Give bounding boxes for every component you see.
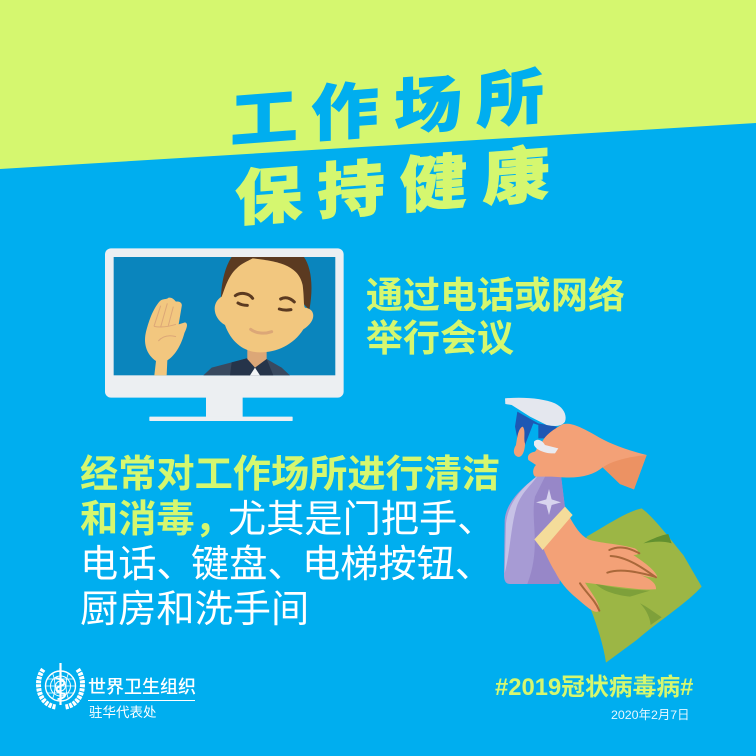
text: clean and disinfect the workplace often: 尤其是门把手、 xyxy=(228,498,495,541)
text: clean and disinfect the workplace often: 键盘、 xyxy=(191,543,306,586)
title: 工 xyxy=(230,82,298,156)
title: 康 xyxy=(482,140,550,214)
text: clean and disinfect the workplace often: 和消毒， xyxy=(80,498,233,541)
icon: WHO emblem xyxy=(38,663,82,707)
fingers behind nozzle xyxy=(514,427,525,457)
title: 所 xyxy=(476,62,544,136)
text: WHO name xyxy=(88,677,196,720)
bottle xyxy=(504,467,567,584)
text: WHO name: 驻华代表处 xyxy=(89,705,157,720)
mouth xyxy=(251,329,272,333)
sparkle xyxy=(536,489,561,515)
neck xyxy=(247,348,267,368)
upper hand xyxy=(528,424,647,489)
date: 2020年2月7日 xyxy=(611,708,690,722)
face xyxy=(215,258,313,352)
text: clean and disinfect the workplace often: 电梯按钮、 xyxy=(302,543,493,586)
cap grip xyxy=(534,440,558,453)
text: hold meetings by phone or online xyxy=(366,275,625,359)
text: clean and disinfect the workplace often xyxy=(80,453,500,631)
text: clean and disinfect the workplace often: 电话、 xyxy=(80,543,195,586)
icon: computer monitor with video call xyxy=(105,248,344,421)
cloth xyxy=(580,508,702,663)
background: lime diagonal band xyxy=(0,0,756,169)
title: 场 xyxy=(394,69,462,143)
raised hand xyxy=(145,298,187,375)
text: hold meetings by phone or online: 通过电话或网络 xyxy=(366,275,625,316)
text: clean and disinfect the workplace often: 经常对工作场所进行清洁 xyxy=(80,453,500,496)
text: WHO name: 世界卫生组织 xyxy=(88,677,196,697)
hair xyxy=(221,257,311,310)
suit xyxy=(203,358,290,375)
title: 持 xyxy=(317,154,385,227)
lower hand xyxy=(543,517,657,612)
title: 保 xyxy=(235,160,303,234)
nozzle xyxy=(515,412,557,445)
text: hold meetings by phone or online: 举行会议 xyxy=(366,318,514,359)
cuff xyxy=(534,507,573,550)
trigger head xyxy=(505,398,566,426)
title xyxy=(230,62,550,234)
text: clean and disinfect the workplace often: 厨房和洗手间 xyxy=(80,588,309,631)
hashtag: #2019冠状病毒病# xyxy=(495,674,693,701)
title: 作 xyxy=(311,76,379,149)
title: 健 xyxy=(400,147,467,221)
eyebrows and eyes xyxy=(235,293,253,298)
icon: hands with spray bottle and cloth xyxy=(504,398,702,663)
